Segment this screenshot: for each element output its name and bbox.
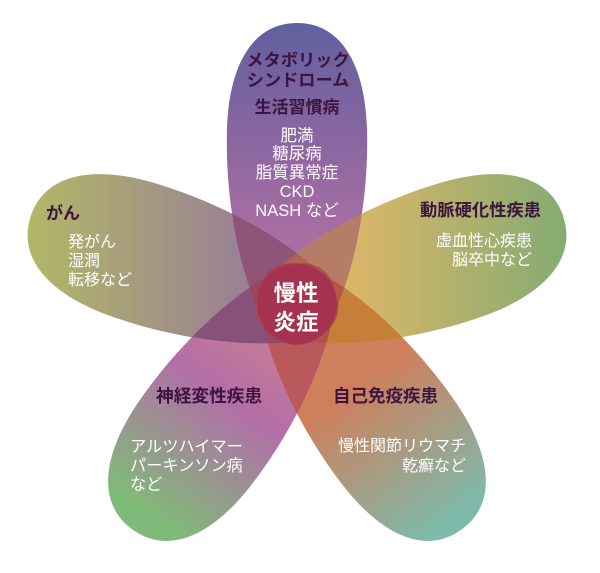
petal: left — [9, 150, 359, 383]
list: lifestyle diseases: 肥満 — [280, 126, 314, 145]
center label: 慢性 — [273, 281, 319, 306]
petal: bottom left — [76, 228, 378, 571]
center circle — [257, 264, 337, 344]
heading: arteriosclerosis: 動脈硬化性疾患 — [420, 200, 541, 220]
list: arteriosclerosis: 虚血性心疾患 — [436, 232, 532, 250]
list: lifestyle diseases: NASH など — [255, 201, 339, 220]
heading: metabolic syndrome: メタボリック — [246, 50, 350, 70]
petal: top — [227, 23, 367, 345]
list: arteriosclerosis: 脳卒中など — [452, 251, 532, 269]
list: neurodegenerative: など — [130, 476, 162, 494]
petal: bottom right — [216, 228, 518, 571]
text block: metabolic syndrome — [246, 50, 350, 220]
list: lifestyle diseases: 脂質異常症 — [256, 163, 338, 182]
heading: cancer: がん — [46, 203, 80, 223]
center label: 炎症 — [273, 310, 319, 335]
text block: autoimmune — [333, 386, 466, 475]
text block: neurodegenerative — [130, 386, 262, 494]
list: autoimmune: 乾癬など — [402, 457, 466, 475]
list: cancer: 発がん — [68, 233, 116, 251]
petal: right — [235, 150, 585, 383]
list: cancer: 転移など — [68, 271, 132, 289]
list: lifestyle diseases: CKD — [280, 183, 314, 201]
heading: autoimmune: 自己免疫疾患 — [333, 386, 438, 406]
list: cancer: 湿潤 — [68, 252, 100, 270]
heading: lifestyle diseases: 生活習慣病 — [254, 98, 340, 117]
petal overlaps — [192, 214, 402, 414]
list: autoimmune: 慢性関節リウマチ — [338, 436, 466, 455]
list: neurodegenerative: アルツハイマー — [130, 438, 243, 456]
heading: neurodegenerative: 神経変性疾患 — [156, 386, 262, 406]
text block: cancer — [46, 203, 132, 289]
list: neurodegenerative: パーキンソン病 — [130, 457, 243, 475]
list: lifestyle diseases: 糖尿病 — [272, 144, 322, 163]
heading: metabolic syndrome: シンドローム — [247, 70, 349, 90]
text block: arteriosclerosis — [420, 200, 541, 269]
